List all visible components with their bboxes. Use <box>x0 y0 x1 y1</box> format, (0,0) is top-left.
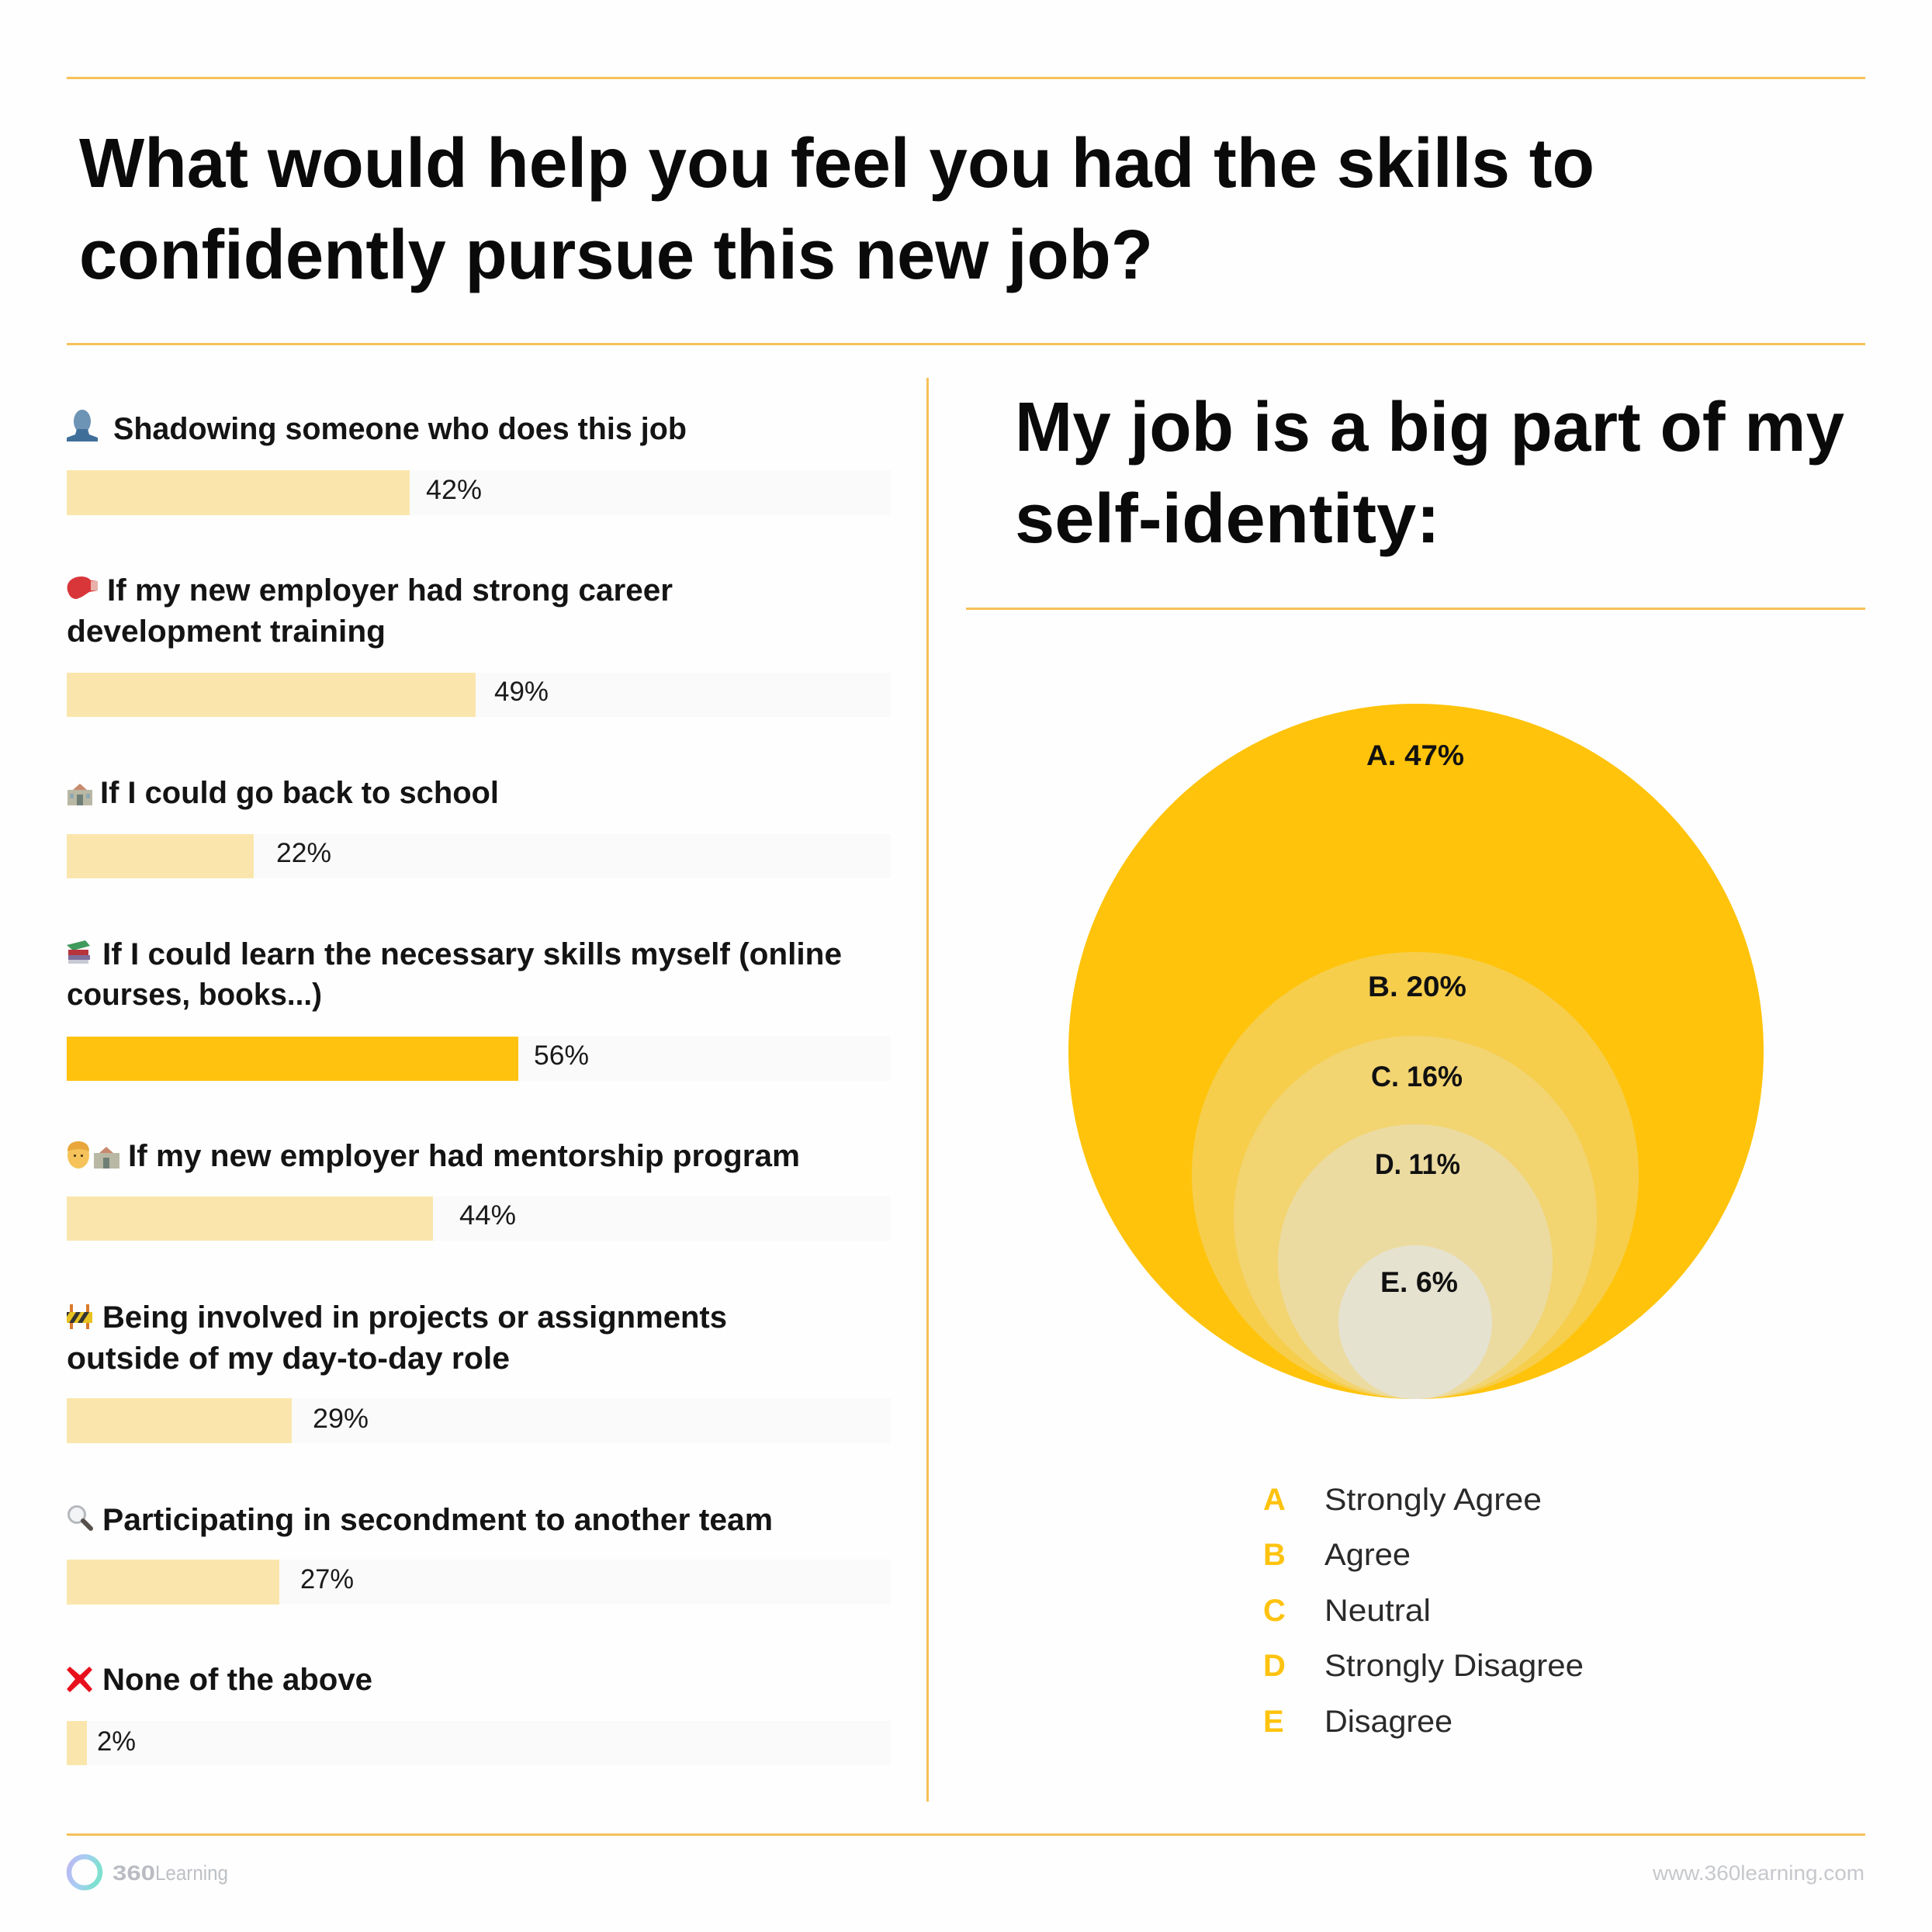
bar: 49%: 49% <box>494 677 549 707</box>
footer website url: www.360learning.com <box>1652 1861 1864 1885</box>
item: mentorship program <box>67 1139 891 1241</box>
icon: red cross <box>67 1667 92 1692</box>
bar: 2% <box>67 1721 891 1765</box>
legend entry C: Neutral <box>1324 1594 1431 1628</box>
footer logo: 360Learning: Learning <box>155 1861 228 1885</box>
legend entry B: Agree <box>1324 1538 1411 1572</box>
heading: self-identity question: My job is a big part of my <box>1015 389 1844 466</box>
footer logo: 360Learning: 360 <box>113 1861 155 1885</box>
circle B 20%: B. 20% <box>1368 971 1466 1002</box>
circle B 20% <box>1192 952 1639 1399</box>
footer logo: 360Learning <box>69 1857 228 1888</box>
chart: nested circles <box>1068 704 1764 1399</box>
bar: 49% <box>67 673 891 717</box>
circle A 47% <box>1068 704 1764 1399</box>
main title: What would help you feel you had the skills to <box>79 125 1594 203</box>
circle D 11% <box>1278 1124 1553 1399</box>
label: learn skills myself: If I could learn the necessary skills myself (online <box>102 937 842 971</box>
legend entry D: Strongly Disagree <box>1324 1649 1584 1683</box>
icon: magnifying glass <box>68 1507 91 1529</box>
bar: 42%: 42% <box>426 475 482 505</box>
bar: 22% <box>67 834 891 878</box>
bar: 29% <box>67 1398 891 1443</box>
label: shadowing: Shadowing someone who does this job <box>113 412 687 446</box>
circle C 16%: C. 16% <box>1371 1061 1463 1092</box>
legend entry B: B <box>1263 1538 1286 1572</box>
bar: 22%: 22% <box>276 838 331 868</box>
item: secondment <box>67 1503 891 1605</box>
item: none of the above <box>67 1663 891 1765</box>
legend entry A: A <box>1263 1483 1286 1517</box>
legend entry B <box>1263 1538 1411 1572</box>
panel: skills bar chart <box>67 410 891 1765</box>
label: none of the above: None of the above <box>102 1663 372 1697</box>
legend entry C: C <box>1263 1594 1286 1628</box>
bar: 2%: 2% <box>97 1726 136 1757</box>
item: career development training <box>67 573 891 717</box>
circle C 16% <box>1234 1036 1597 1399</box>
legend entry D: D <box>1263 1649 1286 1683</box>
main title: confidently pursue this new job? <box>79 216 1153 294</box>
legend entry E: Disagree <box>1324 1705 1452 1739</box>
circle E 6%: E. 6% <box>1380 1266 1458 1298</box>
label: projects and assignments: Being involved in projects or assignments <box>102 1300 727 1335</box>
icon: boxing glove <box>68 576 98 599</box>
icon: school building <box>68 784 92 805</box>
circle E 6% <box>1338 1245 1492 1399</box>
item: back to school <box>67 776 891 878</box>
icon: person silhouette <box>67 410 98 441</box>
icon: stack of books <box>67 940 90 964</box>
circle A 47%: A. 47% <box>1366 739 1464 771</box>
item: projects and assignments <box>67 1300 891 1443</box>
bar: 56% highlighted: 56% <box>534 1040 589 1071</box>
bar: 27% <box>67 1560 891 1605</box>
bar: 27%: 27% <box>300 1564 354 1594</box>
circle D 11%: D. 11% <box>1375 1148 1460 1180</box>
legend entry C <box>1263 1594 1431 1628</box>
legend <box>1263 1483 1584 1739</box>
bar: 56% highlighted <box>67 1037 891 1081</box>
heading: self-identity question: self-identity: <box>1015 480 1440 558</box>
label: back to school: If I could go back to school <box>100 776 499 810</box>
label: career development training: If my new employer had strong career <box>107 573 673 608</box>
bar: 42% <box>67 470 891 515</box>
bar: 44%: 44% <box>459 1200 516 1231</box>
item: learn skills myself: courses, books...) <box>67 978 322 1012</box>
item: shadowing <box>67 410 891 515</box>
label: secondment: Participating in secondment to another team <box>102 1503 773 1537</box>
icon: man and school <box>68 1141 119 1169</box>
main title <box>79 125 1594 294</box>
label: mentorship program: If my new employer had mentorship program <box>128 1139 800 1173</box>
bar: 29%: 29% <box>313 1404 369 1434</box>
item: projects and assignments: outside of my day-to-day role <box>67 1342 510 1376</box>
item: learn skills myself <box>67 937 891 1081</box>
icon: construction barrier <box>67 1304 92 1329</box>
item: career development training: development training <box>67 615 386 649</box>
bar: 44% <box>67 1196 891 1241</box>
heading: self-identity question <box>1015 389 1844 558</box>
legend entry A: Strongly Agree <box>1324 1483 1542 1517</box>
legend entry E <box>1263 1705 1452 1739</box>
legend entry E: E <box>1263 1705 1284 1739</box>
